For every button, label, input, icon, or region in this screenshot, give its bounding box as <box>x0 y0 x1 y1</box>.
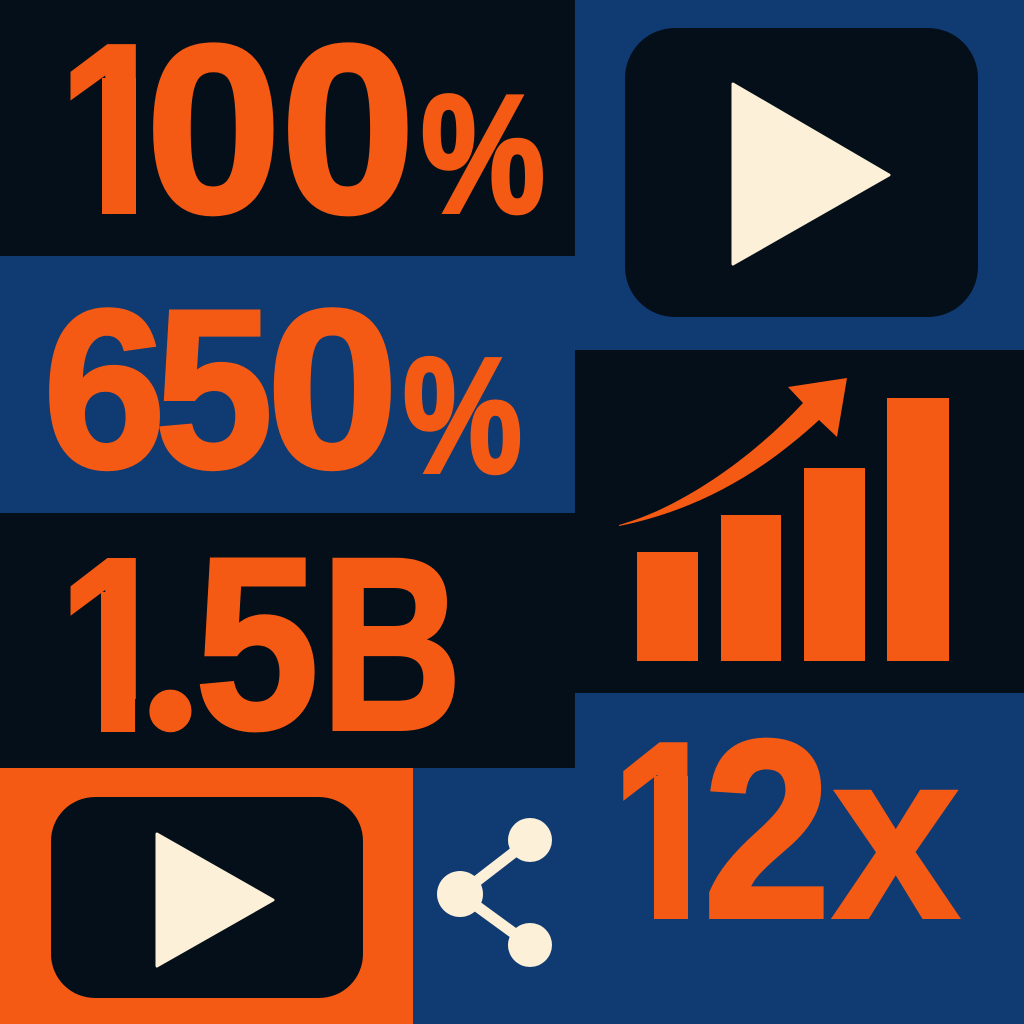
panel: 650% stat: 0 <box>266 262 398 515</box>
panel: top video player <box>575 0 1024 350</box>
panel: 1.5B stat: B <box>321 507 462 782</box>
panel: 1.5B stat: . <box>136 526 202 746</box>
panel: 12x stat <box>575 687 1024 1024</box>
panel: 100% stat: 1 <box>57 0 174 265</box>
panel: growth bar chart <box>575 350 1024 693</box>
panel: 1.5B stat <box>0 505 575 784</box>
panel: 100% stat: 0 <box>146 0 282 263</box>
panel: 650% stat <box>0 256 575 515</box>
panel: 650% stat: 6 <box>43 262 166 515</box>
panel: 1.5B stat: 5 <box>195 506 319 780</box>
panel: 12x stat: 2 <box>703 687 831 971</box>
panel: 100% stat: 0 <box>280 0 416 263</box>
panel: 650% stat: % <box>403 324 522 507</box>
panel: 12x stat: 1 <box>610 688 725 972</box>
panel: 100% stat <box>0 0 575 265</box>
panel: 100% stat: % <box>421 60 545 248</box>
panel: 12x stat: x <box>833 703 959 968</box>
panel: 1.5B stat: 1 <box>57 505 174 784</box>
panel: share icon <box>413 768 575 1024</box>
panel: orange video player <box>0 768 413 1024</box>
panel: 650% stat: 5 <box>155 262 273 515</box>
